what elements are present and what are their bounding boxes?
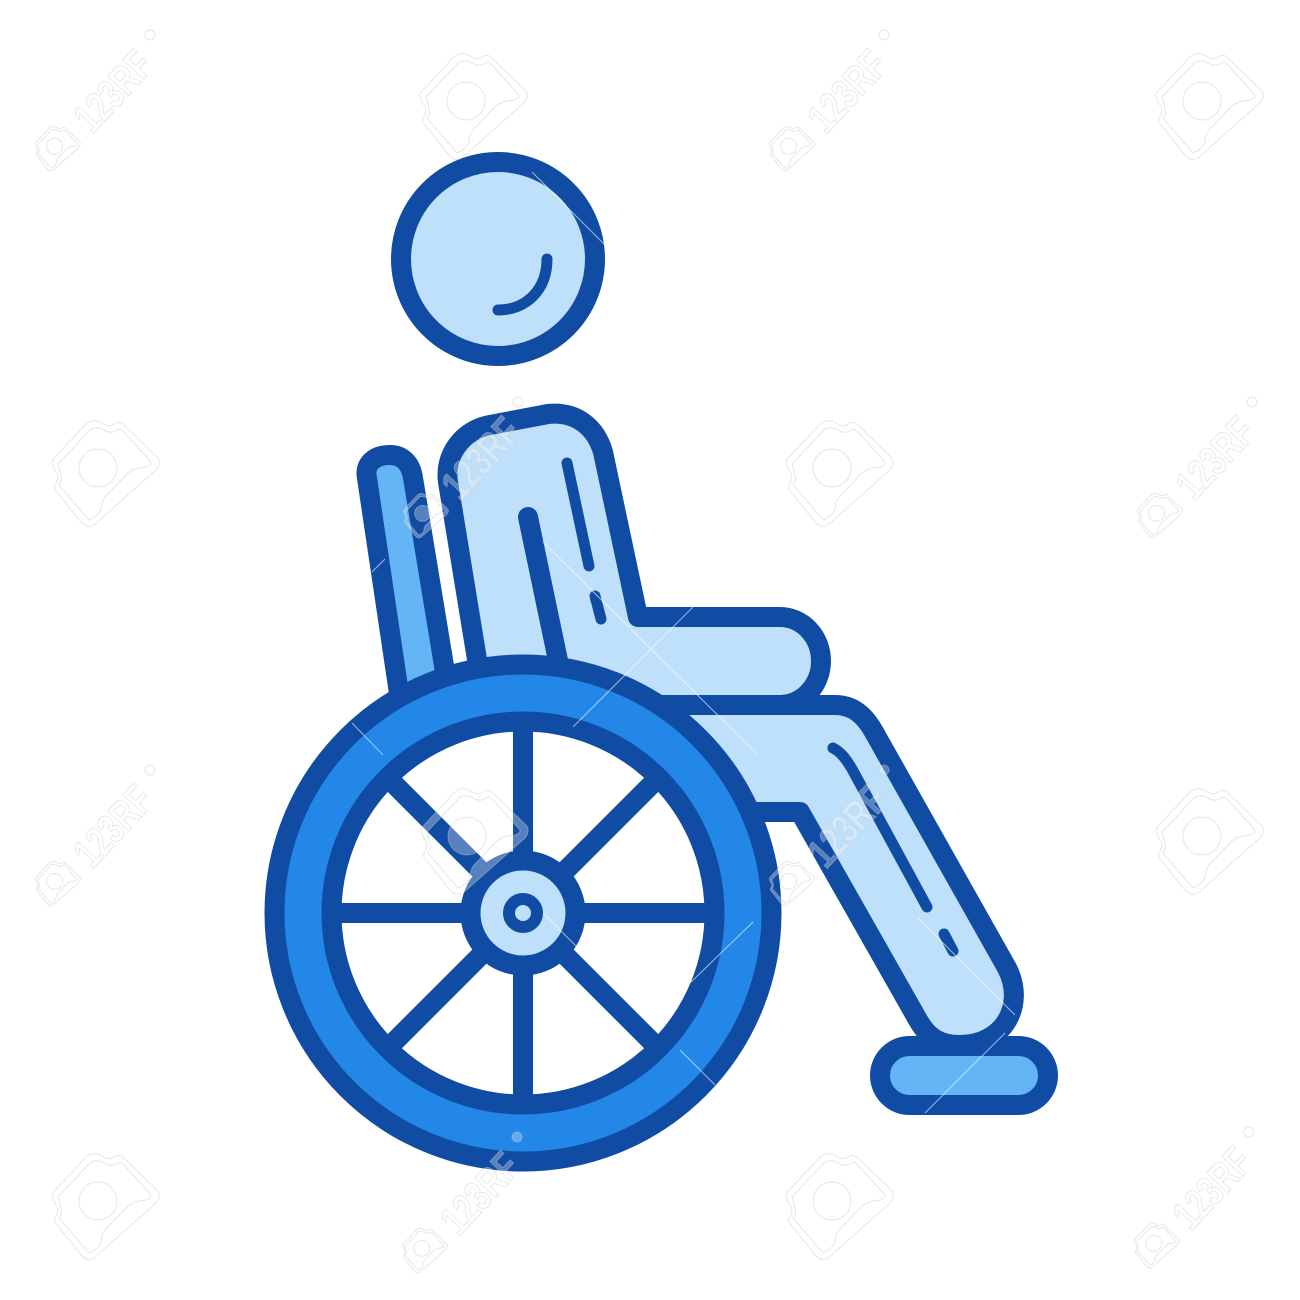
icon: torso and arm xyxy=(447,414,821,705)
watermark: 123RF logos: 123RF xyxy=(64,41,162,141)
icon: head xyxy=(401,162,595,356)
wheel hub xyxy=(470,860,576,966)
icon: wheel xyxy=(274,664,772,1162)
watermark: 123RF logos: 123RF xyxy=(64,776,162,876)
watermark: 123RF logos: 123RF xyxy=(432,408,530,508)
wheel spokes xyxy=(335,725,711,1101)
watermark: 123RF logos: 123RF xyxy=(798,41,896,141)
icon: leg xyxy=(650,705,1014,1045)
icon: footrest xyxy=(880,1046,1048,1105)
watermark: 123RF logos: 123RF xyxy=(798,776,896,876)
watermark: 123RF logos: 123RF xyxy=(1166,408,1264,508)
hairlines xyxy=(352,172,1015,1113)
icon: chair backrest xyxy=(366,455,448,700)
watermark: 123RF logos: 123RF xyxy=(431,1143,529,1243)
watermark: 123RF logos: 123RF xyxy=(1163,1138,1261,1238)
